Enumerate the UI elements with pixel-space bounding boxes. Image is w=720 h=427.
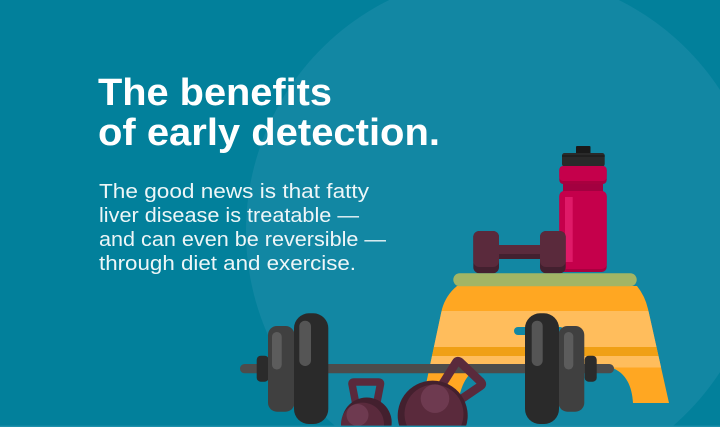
icon: barbell bbox=[240, 313, 614, 424]
title bbox=[98, 72, 440, 154]
icon: water bottle bbox=[559, 146, 607, 272]
body text bbox=[99, 181, 386, 275]
right small plate bbox=[558, 326, 584, 412]
left small plate bbox=[268, 326, 294, 412]
body text: liver disease is treatable — bbox=[99, 205, 359, 227]
bottom edge strip bbox=[0, 426, 720, 427]
background circle bbox=[246, 0, 720, 427]
icon: large kettlebell bbox=[398, 361, 482, 427]
icon: small kettlebell bbox=[341, 382, 392, 427]
icon: dumbbell bbox=[473, 231, 566, 273]
right large plate bbox=[525, 313, 559, 424]
body text: The good news is that fatty bbox=[99, 181, 369, 203]
body text: and can even be reversible — bbox=[99, 229, 386, 251]
body text: through diet and exercise. bbox=[99, 253, 356, 275]
left collar bbox=[257, 356, 269, 382]
stool handle slot bbox=[514, 327, 564, 335]
step platform bbox=[420, 273, 675, 404]
stool body bbox=[420, 286, 675, 404]
title: The benefits bbox=[98, 72, 332, 114]
left large plate bbox=[294, 313, 328, 424]
title: of early detection. bbox=[98, 112, 440, 154]
right collar bbox=[585, 356, 597, 382]
stool top pad bbox=[453, 273, 637, 286]
bar bbox=[240, 364, 614, 373]
